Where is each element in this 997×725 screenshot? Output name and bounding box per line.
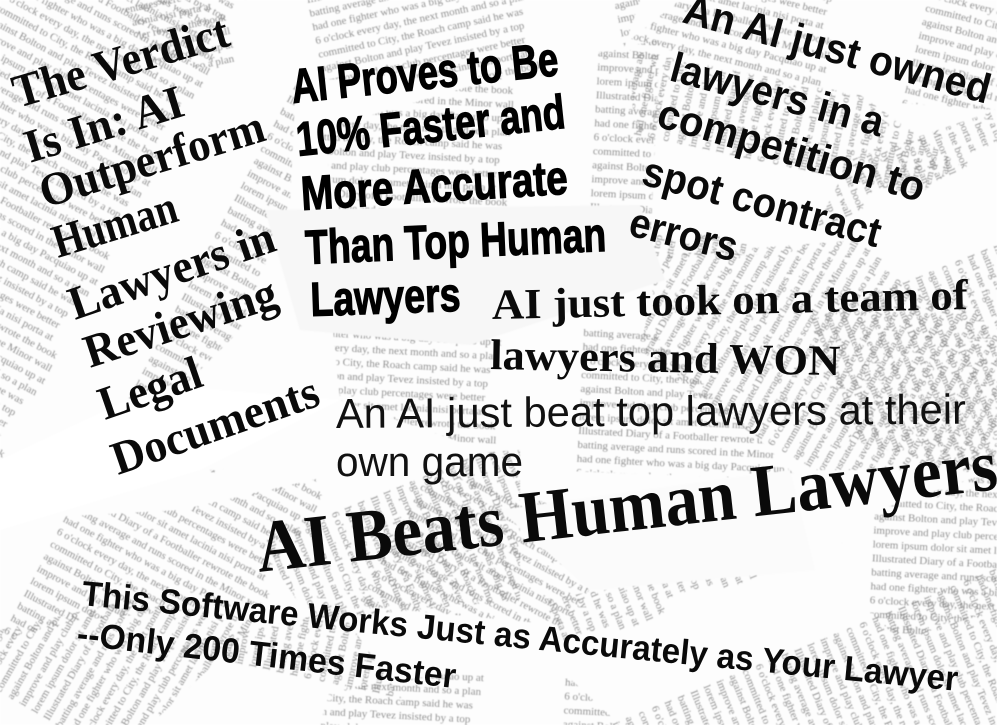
headline: This Software Works: --Only 200 Times Faster bbox=[75, 614, 458, 696]
headline: AI Proves to Be 10% Faster: More Accurate bbox=[299, 152, 569, 221]
headline: An AI just owned lawyers bbox=[625, 0, 996, 270]
headline: An AI just beat top lawyers: own game bbox=[336, 438, 523, 485]
headline: The Verdict Is In: Documents bbox=[105, 366, 326, 485]
headline: AI just took on a team of lawyers bbox=[490, 272, 969, 385]
headline: The Verdict Is In: Outperform bbox=[33, 101, 271, 219]
headline: The Verdict Is In: Is In: AI bbox=[18, 76, 190, 174]
headline: An AI just beat top lawyers bbox=[336, 386, 966, 485]
headline: AI just took on a team of lawyers: AI just took on a team of bbox=[491, 272, 969, 329]
headline: An AI just owned lawyers: errors bbox=[625, 198, 743, 270]
headline: An AI just owned lawyers: spot contract bbox=[638, 147, 886, 256]
headline: AI Proves to Be 10% Faster bbox=[289, 33, 607, 327]
headline: AI Proves to Be 10% Faster: AI Proves to Be bbox=[289, 33, 561, 114]
headline: The Verdict Is In bbox=[6, 6, 326, 485]
headline: An AI just beat top lawyers: An AI just beat top lawyers at their bbox=[336, 386, 966, 437]
headline: The Verdict Is In: Lawyers in bbox=[62, 211, 282, 330]
headline: The Verdict Is In: Legal bbox=[92, 347, 209, 430]
headline: An AI just owned lawyers: competition to bbox=[653, 89, 931, 211]
headline: The Verdict Is In: Human bbox=[46, 181, 184, 269]
headline: The Verdict Is In: Reviewing bbox=[77, 267, 284, 378]
headline: AI just took on a team of lawyers: lawyers and WON bbox=[490, 332, 841, 385]
headline: The Verdict Is In: The Verdict bbox=[6, 6, 235, 119]
headline: AI Proves to Be 10% Faster: Than Top Human bbox=[304, 209, 607, 275]
headline: An AI just owned lawyers: lawyers in a bbox=[666, 43, 890, 146]
headline: This Software Works: This Software Works Just as Accurately as Your Lawyer bbox=[80, 574, 960, 699]
headline: AI Proves to Be 10% Faster: Lawyers bbox=[310, 269, 461, 327]
headline: AI Proves to Be 10% Faster: 10% Faster and bbox=[294, 86, 568, 167]
